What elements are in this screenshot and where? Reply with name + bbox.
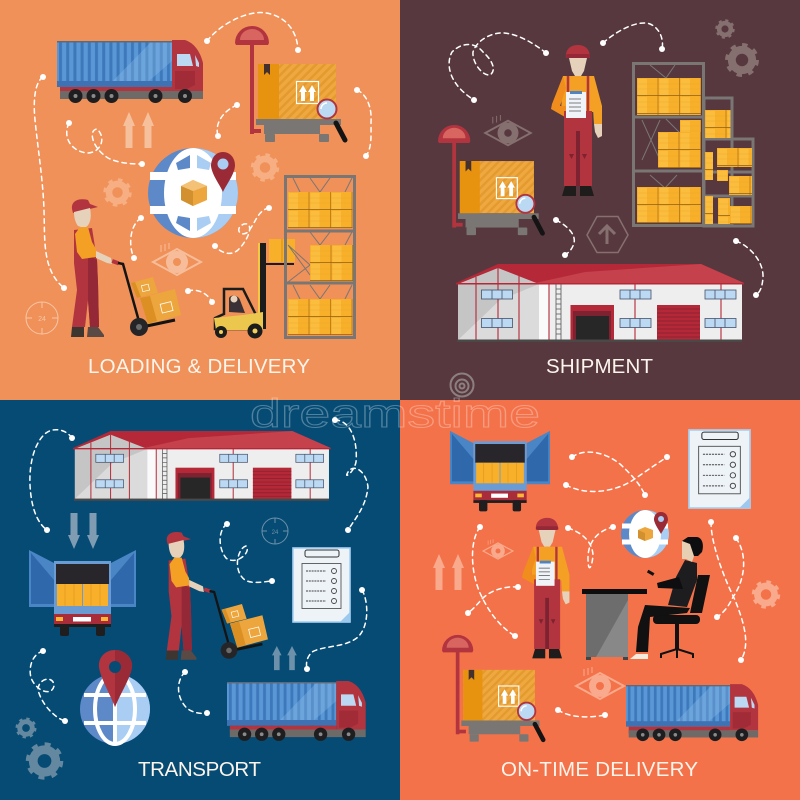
panel: on-time delivery [400, 400, 800, 800]
globe with parcel [621, 510, 669, 558]
worker with hand truck [71, 199, 181, 337]
panel: shipment [400, 0, 800, 400]
icon: 24 hour clock [26, 302, 58, 334]
scale with box [442, 635, 543, 742]
warehouse [73, 431, 331, 501]
panel: transport [0, 400, 400, 800]
icon: small gear [716, 20, 734, 38]
shelf with boxes [285, 176, 355, 338]
route dashes [449, 23, 763, 298]
worker with hand truck [166, 532, 268, 660]
scale with box [438, 125, 542, 235]
businessman at desk [582, 537, 710, 660]
route dashes [34, 13, 371, 305]
route dashes [30, 417, 368, 724]
icon: eye [485, 115, 531, 145]
icon: small gear [17, 719, 35, 737]
open truck [450, 431, 550, 511]
icon: 24 hour clock: 24 [272, 530, 279, 536]
icon: gear right [252, 155, 278, 180]
watermark spiral [450, 374, 474, 396]
storage racks [633, 64, 753, 226]
clipboard [293, 548, 350, 622]
icon: 24 hour clock: 24 [38, 316, 46, 323]
heading: TRANSPORT [138, 758, 261, 781]
icon: up arrows [123, 112, 154, 148]
truck [227, 681, 366, 741]
warehouse [456, 264, 744, 342]
globe with parcel [148, 148, 238, 238]
icon: eye small [483, 539, 513, 559]
icon: large gear [28, 744, 61, 778]
worker with clipboard [522, 518, 569, 658]
clipboard [689, 430, 750, 508]
globe with pin [80, 650, 150, 744]
icon: hexagon arrow [587, 216, 628, 252]
watermark: dreamstime [250, 392, 540, 436]
icon: 24 hour clock [262, 518, 288, 544]
worker with clipboard [551, 45, 602, 196]
icon: gear [105, 180, 130, 205]
route dashes [465, 452, 746, 718]
truck [57, 40, 203, 103]
icon: eye [153, 243, 201, 275]
scale with box [235, 26, 345, 142]
heading: LOADING & DELIVERY [88, 355, 310, 378]
truck [626, 684, 758, 741]
heading: ON-TIME DELIVERY [501, 758, 698, 781]
icon: up arrows [272, 646, 297, 670]
icon: eye large [576, 667, 624, 699]
panel: loading and delivery [0, 0, 400, 400]
icon: up arrows [433, 554, 464, 590]
forklift [214, 239, 295, 338]
icon: down arrows [68, 513, 99, 549]
icon: gear [753, 582, 779, 607]
icon: large gear [727, 45, 757, 75]
heading: SHIPMENT [546, 355, 653, 378]
open truck [29, 550, 136, 636]
